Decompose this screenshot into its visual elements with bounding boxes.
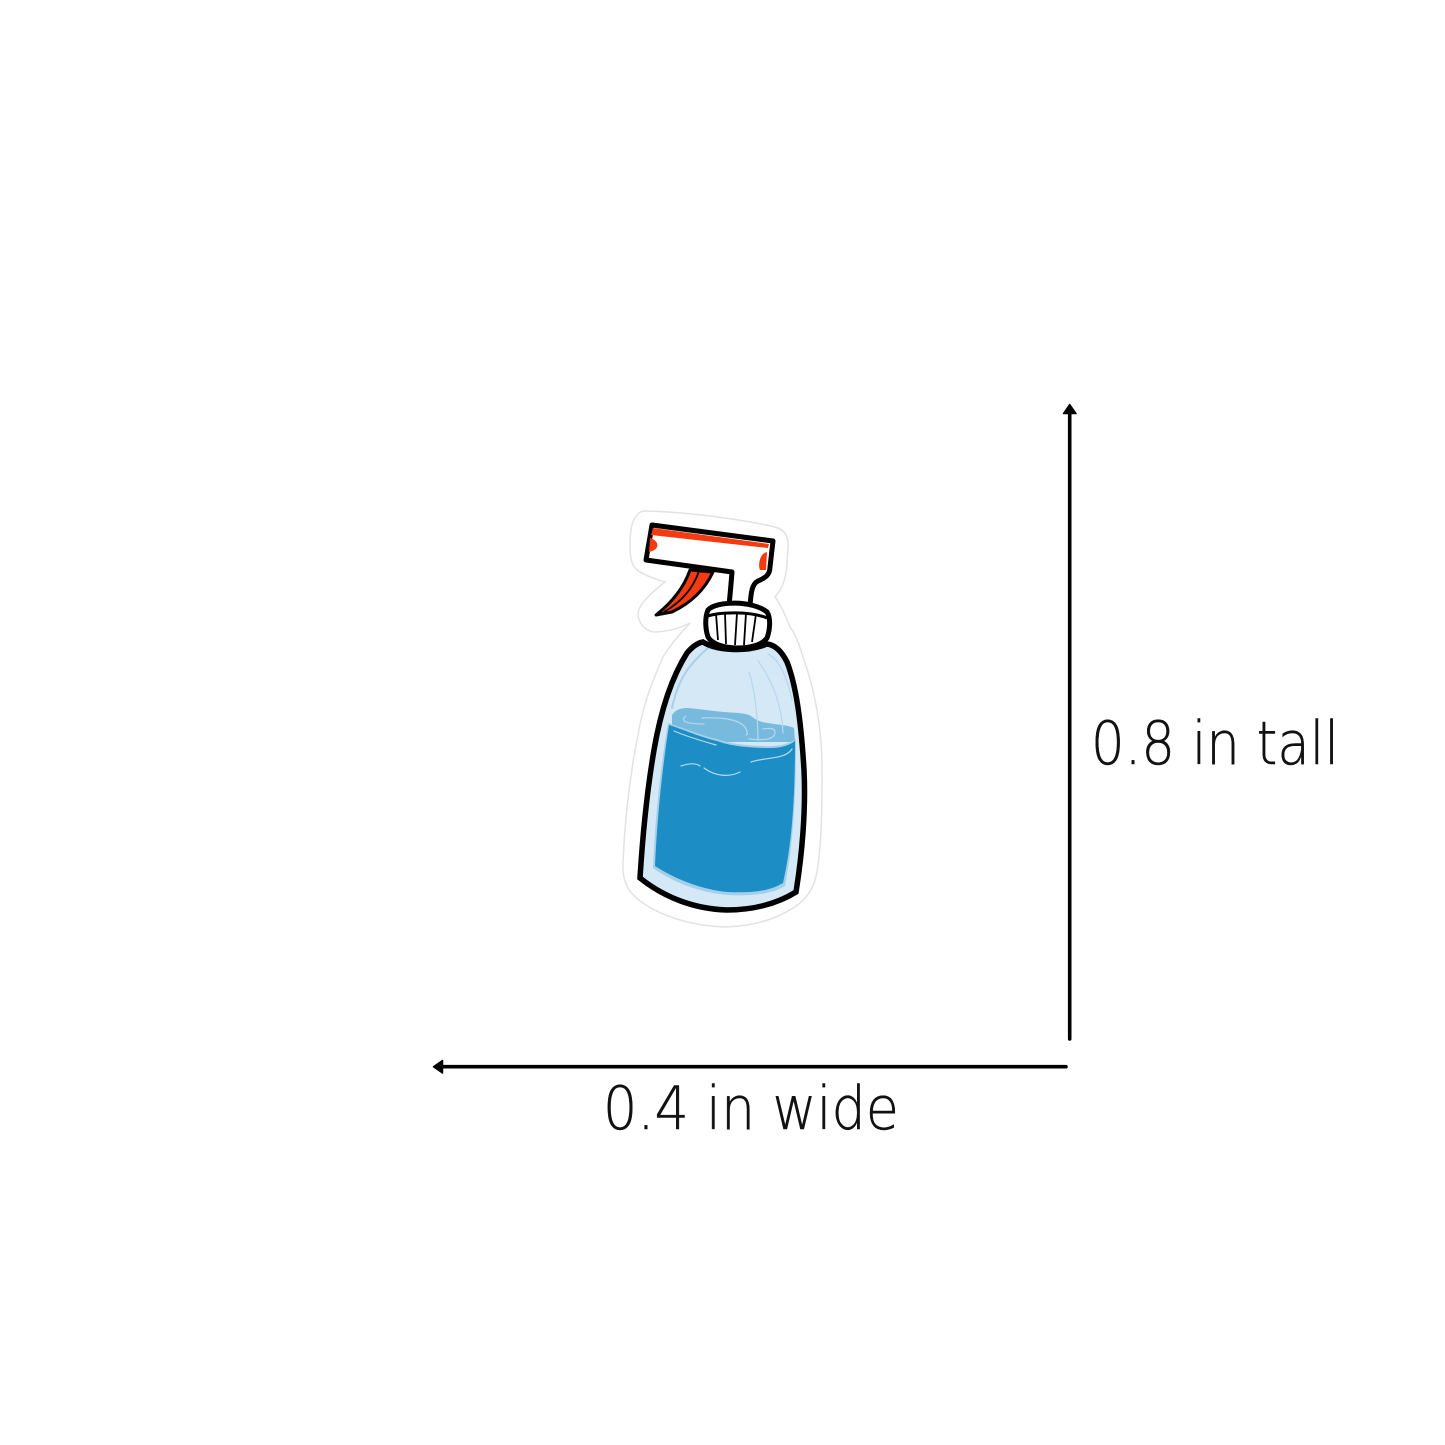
width label: 0.4 in wide <box>603 1074 899 1144</box>
blue liquid edge <box>653 723 796 895</box>
red left dot <box>649 538 657 552</box>
vertical arrow <box>1064 404 1076 1039</box>
light water surface <box>672 708 795 742</box>
sticker: spray bottle <box>623 511 822 927</box>
red right dot <box>759 552 767 570</box>
nozzle head <box>646 525 773 606</box>
height label: 0.8 in tall <box>1091 709 1339 779</box>
bottle glass <box>640 642 805 910</box>
bottle body <box>640 642 805 910</box>
spray head <box>646 525 773 648</box>
trigger highlight <box>664 571 699 612</box>
blue liquid <box>655 725 795 892</box>
sticker die-cut outline <box>623 511 822 927</box>
ribbed cap <box>706 603 770 648</box>
red top stripe <box>651 528 769 548</box>
bottle black outline <box>640 642 805 910</box>
cap ribs <box>708 613 767 645</box>
cap shape <box>706 603 770 648</box>
horizontal arrow <box>434 1060 1066 1073</box>
trigger <box>656 570 713 615</box>
water ripples and bottle creases <box>672 648 792 775</box>
